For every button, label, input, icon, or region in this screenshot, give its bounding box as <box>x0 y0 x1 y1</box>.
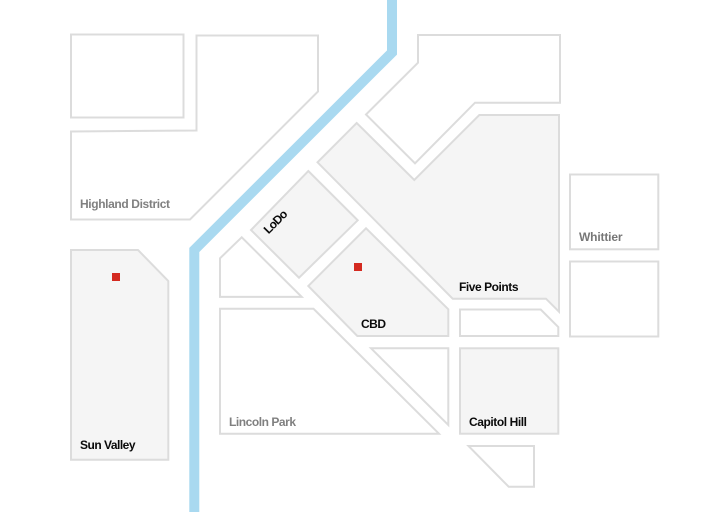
block: CBD <box>308 228 448 336</box>
block: south wedge <box>468 446 534 487</box>
marker: Sun Valley <box>112 273 120 281</box>
label: Whittier: Whittier <box>579 230 623 244</box>
block: south of Whittier <box>570 262 658 336</box>
label: Lincoln Park: Lincoln Park <box>229 415 296 429</box>
label: Five Points: Five Points <box>459 280 519 294</box>
block: triangle south of CBD <box>371 348 448 425</box>
label: Highland District: Highland District <box>80 197 170 211</box>
block: small wedge west of LoDo <box>220 237 302 297</box>
block: small east of CBD <box>460 310 558 336</box>
block: Lincoln Park <box>220 309 439 434</box>
label: LoDo: LoDo <box>261 207 290 237</box>
block: Sun Valley <box>71 250 168 460</box>
label: Capitol Hill: Capitol Hill <box>469 415 527 429</box>
block: Highland District <box>71 36 318 220</box>
block: Capitol Hill <box>460 348 558 434</box>
block: Five Points <box>318 115 559 312</box>
river <box>194 0 392 512</box>
marker: CBD <box>354 263 362 271</box>
block: northeast <box>366 35 560 163</box>
label: Sun Valley: Sun Valley <box>80 438 136 452</box>
block: Whittier <box>570 174 658 249</box>
block: LoDo <box>251 171 358 278</box>
label: CBD: CBD <box>361 317 386 331</box>
block: unnamed northwest <box>71 34 184 118</box>
